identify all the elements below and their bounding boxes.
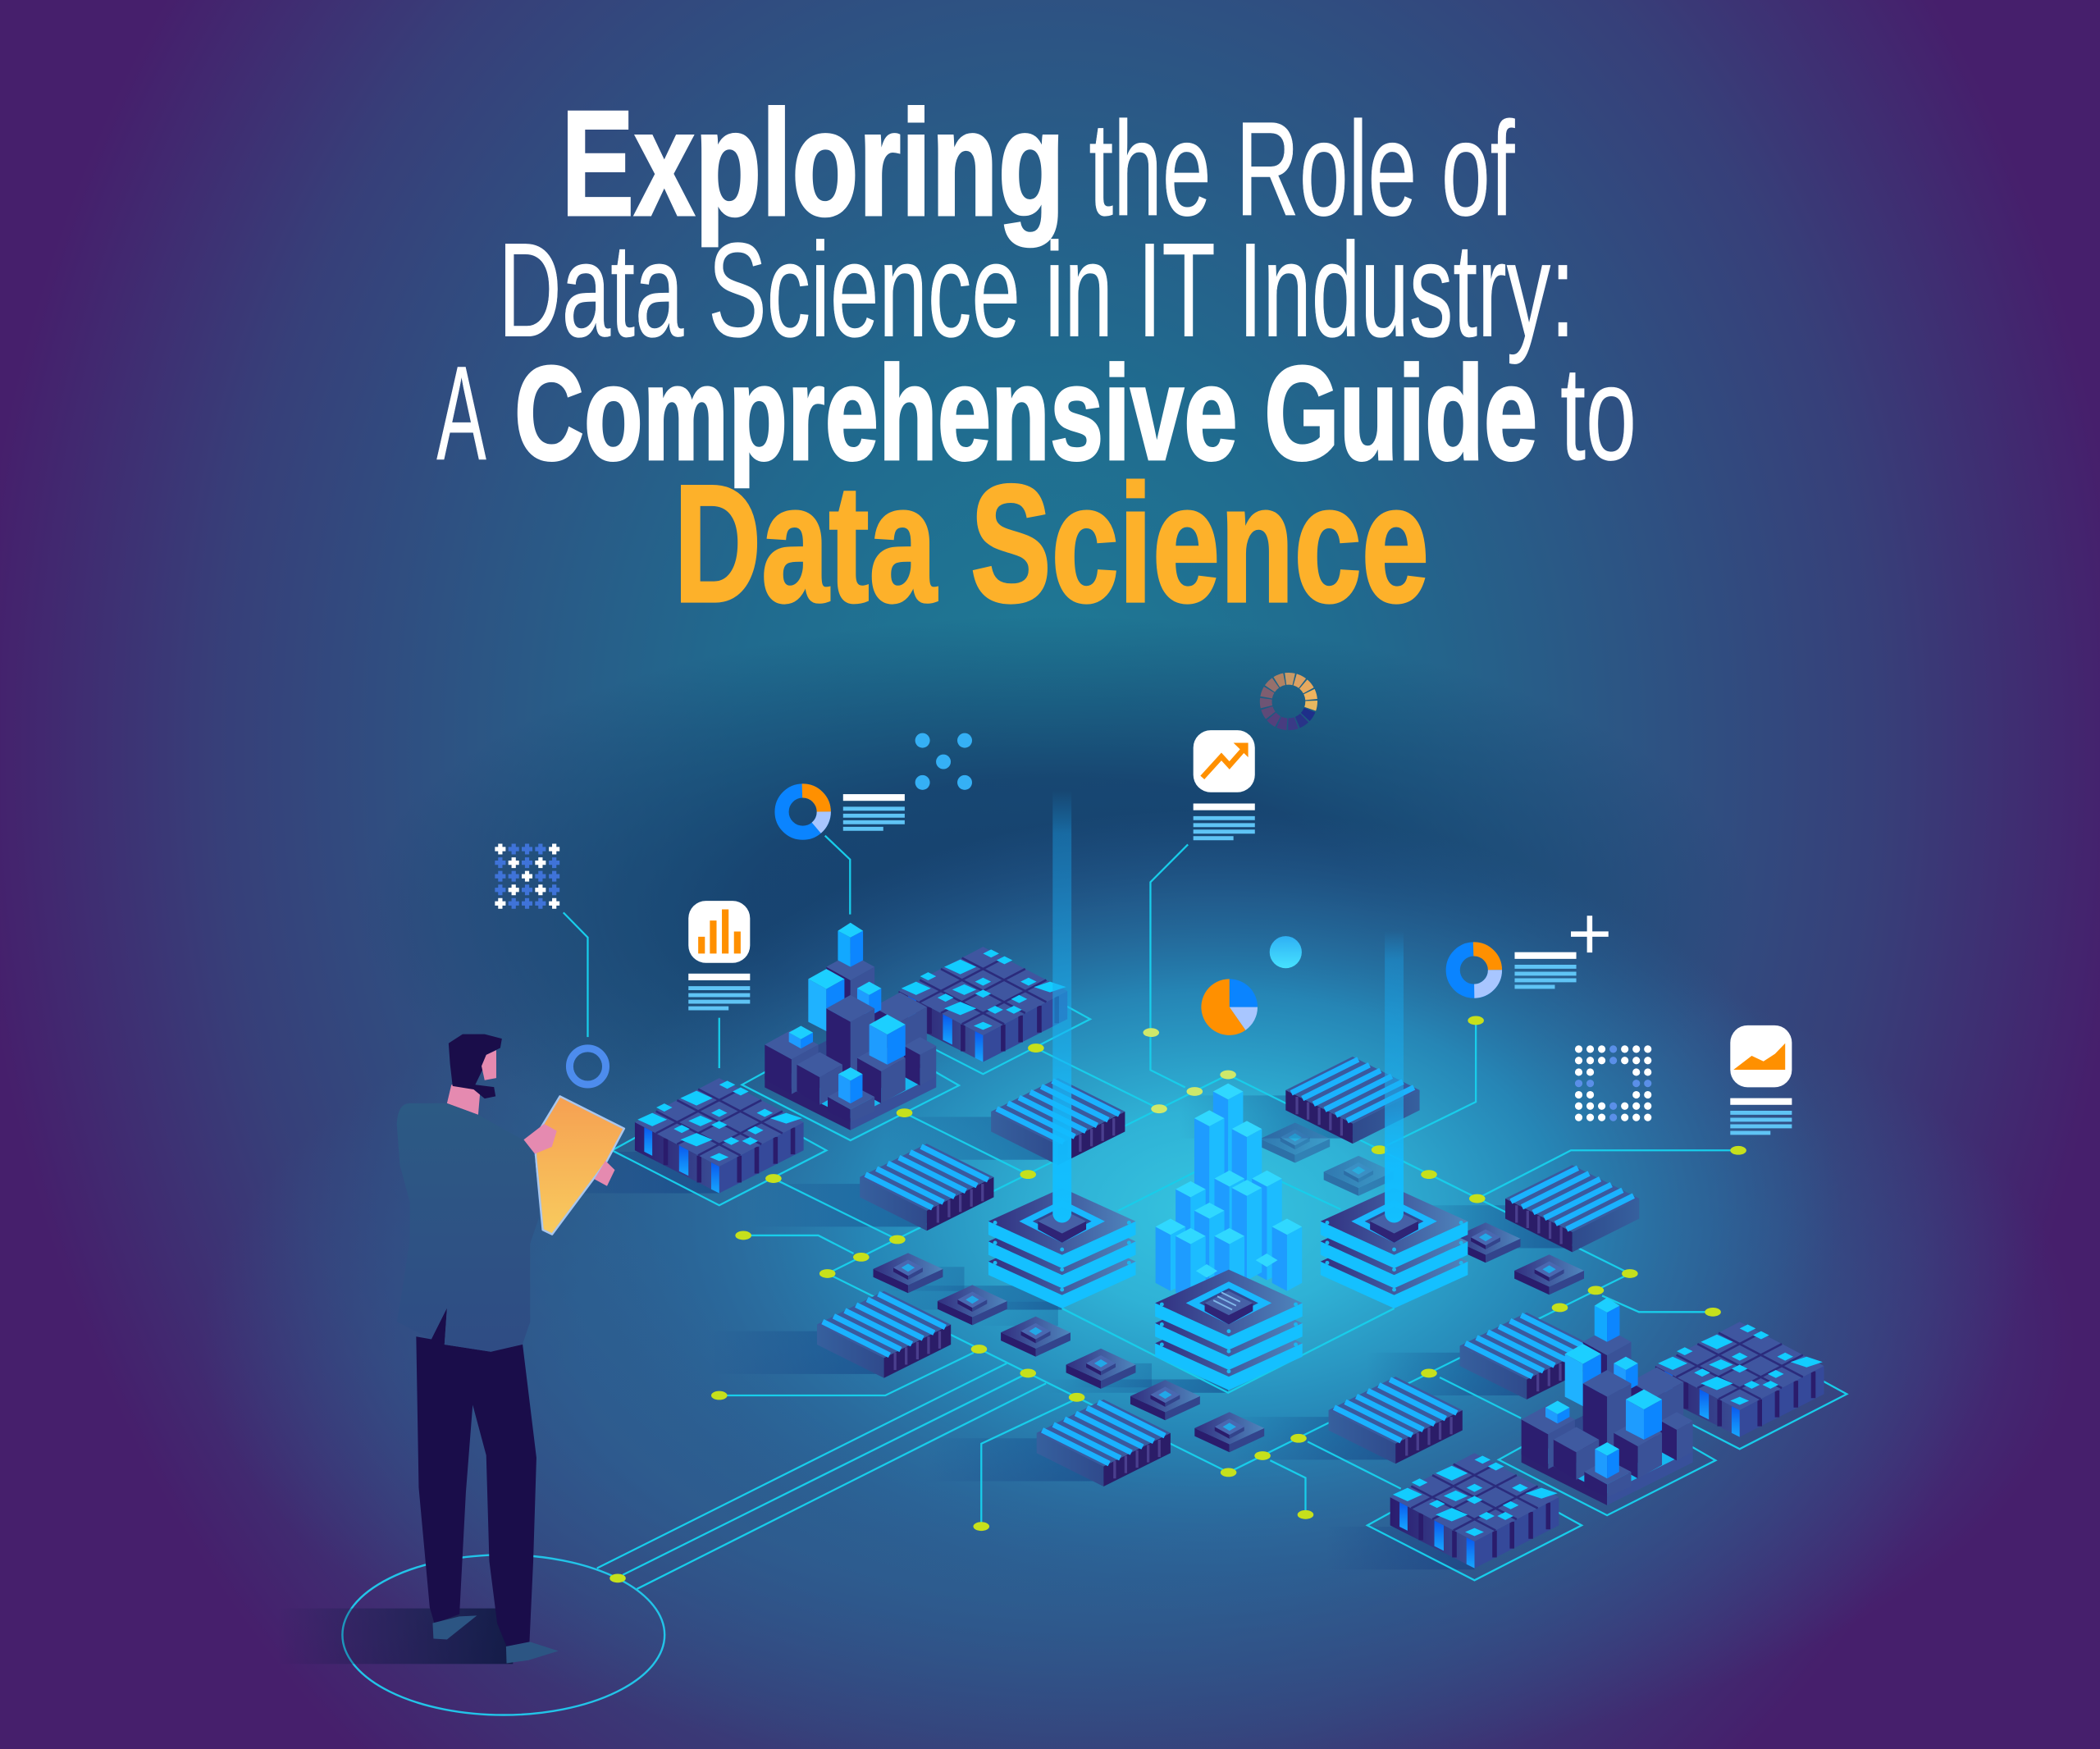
neck: [447, 1085, 480, 1115]
icon: glowing dot: [1270, 936, 1302, 968]
hair and beard: [449, 1034, 502, 1098]
chip: [1514, 1254, 1584, 1295]
hand holding tablet: [595, 1161, 614, 1186]
title words: Comprehensive Guide: Comprehensive Guide: [514, 338, 1537, 488]
coat: [397, 1103, 540, 1352]
icon: dot square: [1578, 1049, 1648, 1117]
grid block bottom: [1367, 1453, 1582, 1580]
title word: A: A: [436, 338, 486, 488]
chip: [874, 1253, 943, 1293]
light beam left: [1052, 790, 1071, 1222]
icon: donut chart: [782, 791, 824, 833]
isometric block shadows: [509, 1095, 1573, 1569]
title word: Exploring: Exploring: [561, 79, 1065, 247]
hand on tablet: [523, 1124, 557, 1154]
title highlight: Data Science: Data Science: [673, 450, 1429, 637]
faded chip: [1260, 1122, 1330, 1162]
mirrored fin block: [1285, 1057, 1420, 1144]
icon: plus sign: [1571, 916, 1609, 952]
small chips row: [874, 1122, 1584, 1452]
fin block: [1460, 1313, 1594, 1400]
icon: plus grid: [495, 843, 559, 909]
city towers lower right: [1499, 1298, 1715, 1515]
fin block: [991, 1078, 1125, 1165]
trousers: [416, 1308, 536, 1646]
title word: to: to: [1560, 338, 1637, 488]
fin block: [1329, 1377, 1463, 1464]
icon: donut chart right: [1453, 949, 1495, 991]
person shadow: [277, 1609, 513, 1664]
faded chip: [1324, 1156, 1394, 1196]
tiered stack centre with chip: [1155, 1270, 1303, 1390]
callout lines: [564, 836, 850, 1068]
chip: [1130, 1380, 1200, 1420]
icon: segmented ring: [1257, 669, 1321, 733]
ground circle under person: [342, 1555, 664, 1715]
face: [482, 1050, 496, 1080]
circle connector node: [609, 1573, 626, 1582]
shoes: [432, 1615, 559, 1664]
circuit lines network: [597, 844, 1738, 1589]
city towers upper left: [742, 923, 959, 1140]
icon card: bar chart: [688, 901, 750, 963]
tablet: [535, 1096, 624, 1235]
icon card: rising arrow: [1194, 730, 1255, 792]
text lines under arrow card: [1194, 803, 1255, 840]
text lines beside donut: [843, 794, 905, 831]
grid block right: [1632, 1322, 1847, 1449]
chip: [1066, 1349, 1135, 1389]
fin block: [860, 1144, 993, 1231]
chip: [938, 1285, 1007, 1325]
tiered stack left: [988, 1188, 1135, 1308]
title words: the Role of: the Role of: [1089, 94, 1515, 244]
chip: [1194, 1412, 1264, 1452]
grid block top: [876, 947, 1090, 1074]
heat sink fin blocks: [817, 1057, 1639, 1486]
title: [436, 79, 1637, 637]
text lines under bar chart: [688, 974, 750, 1011]
tiered stack right: [1321, 1188, 1468, 1308]
server grid blocks: [612, 947, 1847, 1580]
central skyscraper bars: [1156, 1084, 1302, 1300]
light beam right: [1385, 931, 1404, 1222]
chip: [1001, 1317, 1071, 1357]
icon: five dots: [915, 733, 972, 790]
fin block: [817, 1291, 951, 1378]
title line: Data Science in IT Industry: Data Science in IT Industry:: [498, 215, 1575, 365]
icon: blue ring: [569, 1048, 606, 1085]
person with tablet: [397, 1034, 624, 1664]
fin block: [1037, 1400, 1171, 1486]
connector nodes: [711, 1016, 1746, 1531]
mirrored fin block: [1505, 1165, 1639, 1252]
grid block left: [612, 1078, 826, 1205]
text lines under area chart: [1730, 1098, 1792, 1135]
text lines beside right donut: [1514, 952, 1577, 989]
icon card: area chart: [1730, 1025, 1792, 1087]
chip: [1451, 1222, 1520, 1263]
icon: pie chart: [1201, 979, 1258, 1035]
